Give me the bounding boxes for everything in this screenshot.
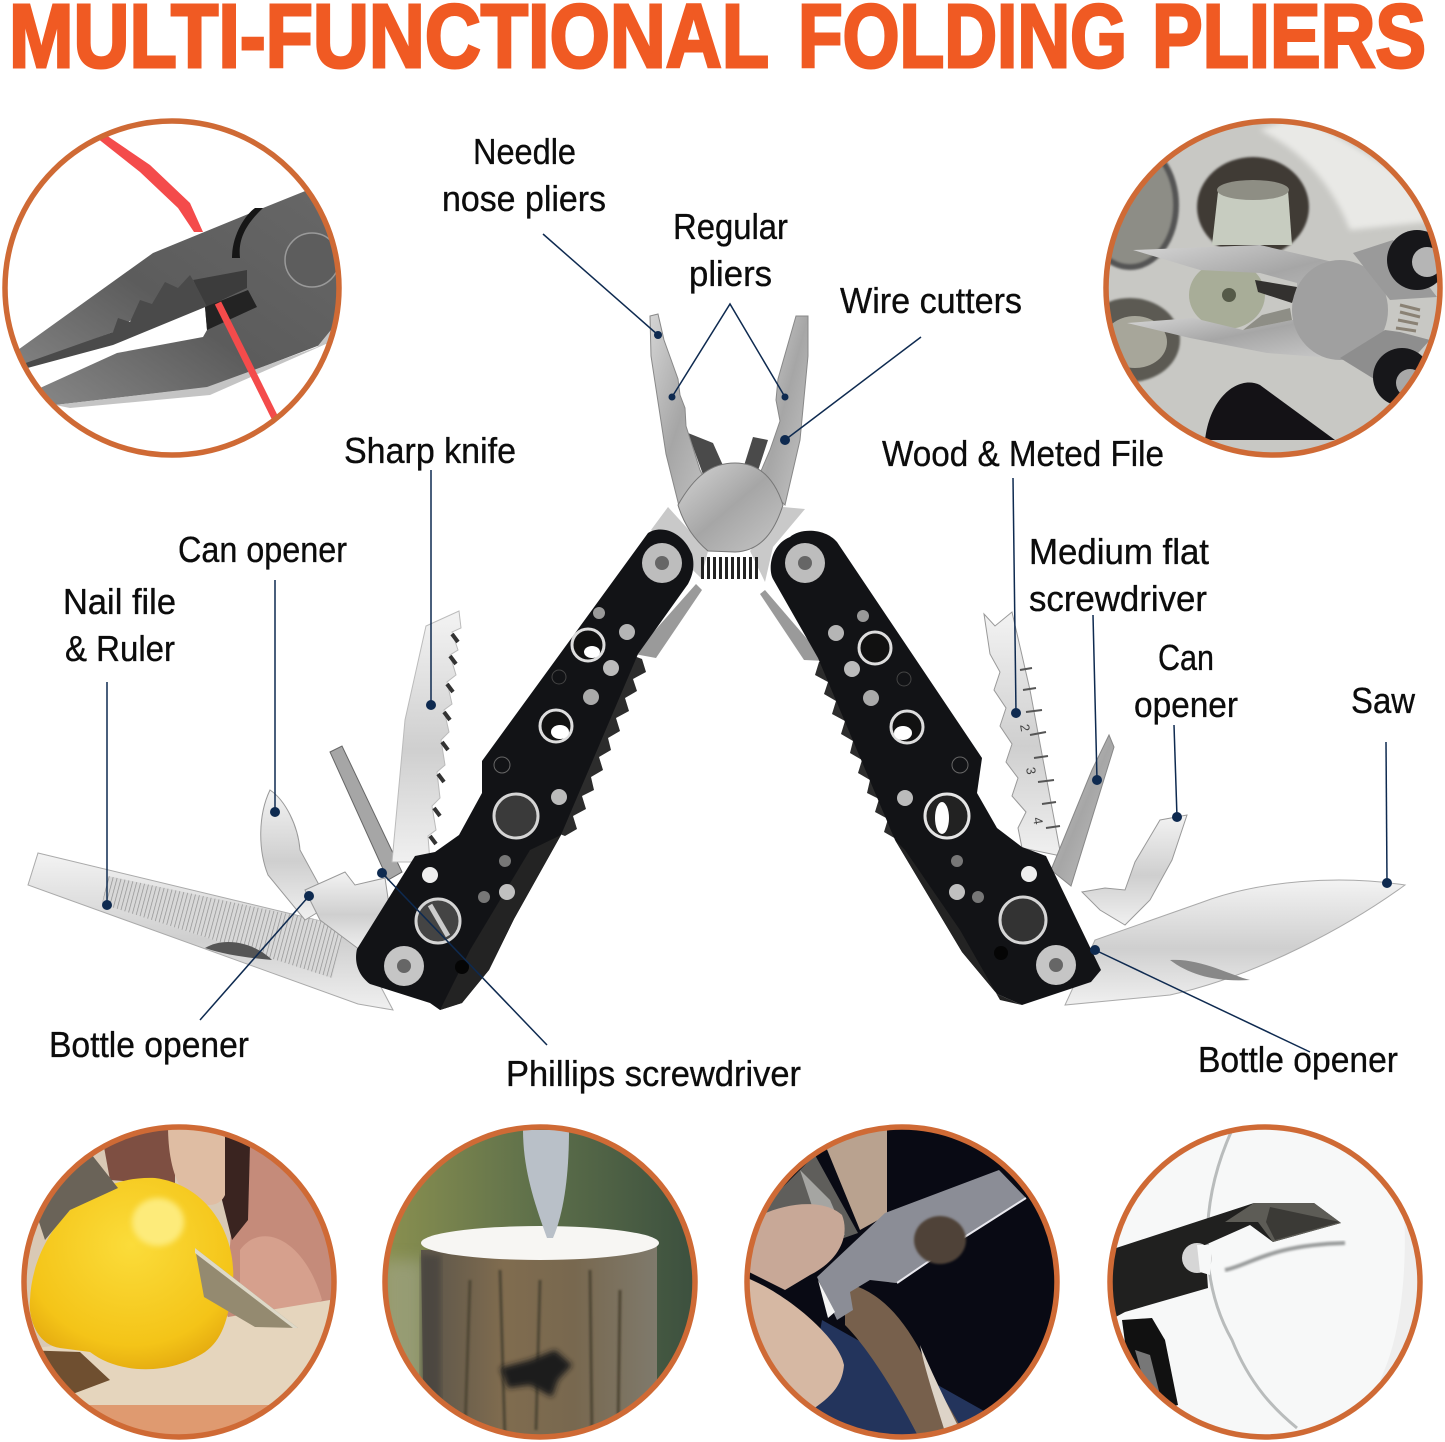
steel collars [651, 507, 805, 582]
right file and ruler blade: 3 [1023, 766, 1039, 776]
left plier jaw [650, 314, 715, 510]
right handle [760, 531, 1101, 1005]
right file and ruler blade [984, 612, 1061, 856]
pivot hub [678, 463, 783, 552]
title [9, 0, 1426, 87]
label: needle nose pliers: nose pliers [442, 178, 606, 219]
label: regular pliers: Regular [673, 206, 788, 247]
panel: whittling branch photo [745, 1125, 1065, 1442]
label: wood and metal file: Wood & Meted File [882, 433, 1164, 474]
label: left can opener: Can opener [178, 529, 347, 570]
panel: glass cutting photo [1110, 1127, 1420, 1437]
label: right bottle opener: Bottle opener [1198, 1039, 1398, 1080]
label: sharp knife: Sharp knife [344, 430, 516, 471]
label: regular pliers: pliers [689, 253, 772, 294]
label: nail file and ruler: Nail file [63, 581, 176, 622]
gear teeth [701, 557, 758, 579]
right can opener [1082, 815, 1187, 925]
panel: wheel nut photo [1080, 115, 1445, 455]
label: phillips screwdriver: Phillips screwdriver [506, 1053, 801, 1094]
panel: cutting red wire photo [5, 121, 345, 455]
right screwdriver [1051, 735, 1114, 886]
panel: lemon cutting photo [20, 1125, 340, 1442]
right knife blade [1065, 880, 1405, 1005]
label: regular pliers [673, 206, 788, 294]
left saw blade [392, 611, 461, 862]
label: right can opener: opener [1134, 684, 1238, 725]
right plier jaw [758, 316, 808, 505]
label: medium flat screwdriver: screwdriver [1029, 578, 1207, 619]
left handle [356, 529, 702, 1010]
panel: knife in wood stump photo [380, 1125, 700, 1442]
pliers cutter blocks [688, 433, 768, 480]
label: medium flat screwdriver [1029, 531, 1209, 619]
left Phillips screwdriver [330, 746, 402, 880]
right file and ruler blade: 4 [1030, 816, 1046, 826]
label: nail file and ruler: & Ruler [65, 628, 175, 669]
label: left bottle opener: Bottle opener [49, 1024, 249, 1065]
label: medium flat screwdriver: Medium flat [1029, 531, 1209, 572]
left can opener blade [261, 790, 330, 920]
left nail file and ruler blade [28, 853, 393, 1010]
multi-tool illustration [28, 314, 1405, 1010]
label: right can opener: Can [1158, 637, 1214, 678]
label: wire cutters: Wire cutters [840, 280, 1022, 321]
leader lines and dots [102, 234, 1392, 1052]
label: nail file and ruler [63, 581, 176, 669]
label: right can opener [1134, 637, 1238, 725]
label: needle nose pliers [442, 131, 606, 219]
right file and ruler blade: 2 [1017, 723, 1033, 733]
left bottle opener blade [305, 872, 395, 950]
label: saw: Saw [1351, 680, 1416, 721]
label: needle nose pliers: Needle [473, 131, 576, 172]
